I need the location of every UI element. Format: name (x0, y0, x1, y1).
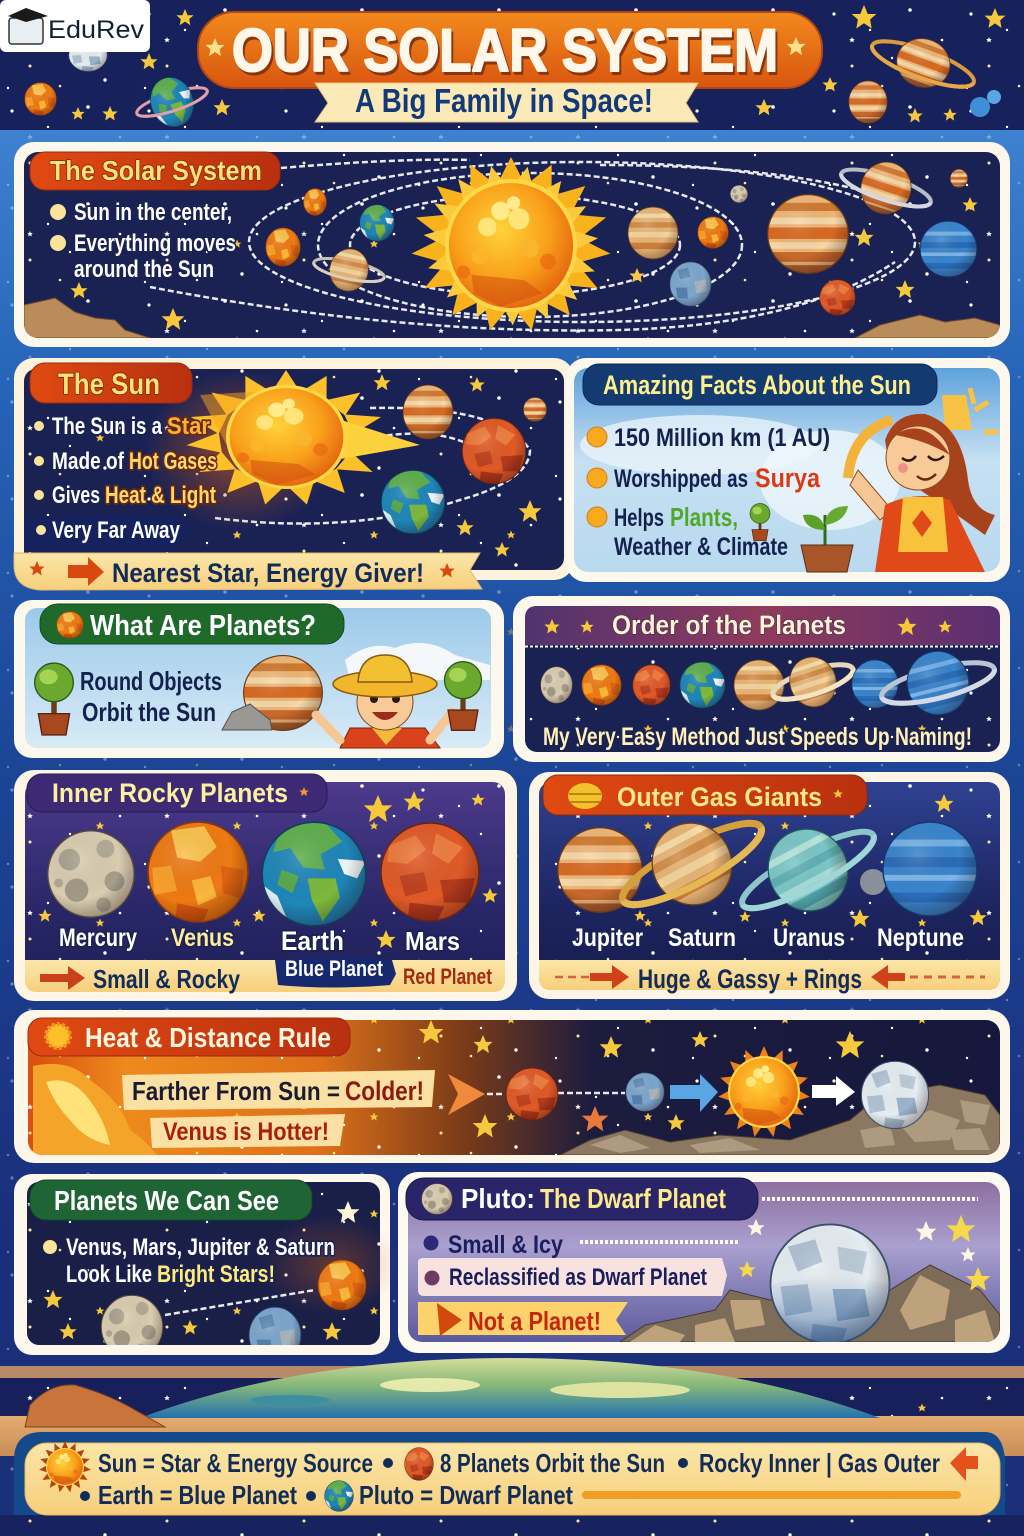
venus callout: Venus is Hotter! (163, 1118, 329, 1146)
rocks and pluto (620, 1222, 1000, 1346)
ribbon: nearest star: Nearest Star, Energy Giver! (112, 558, 424, 588)
sun facts list: Very Far Away (52, 517, 181, 544)
panel: summary (0, 1432, 1024, 1536)
summary line 2: Earth = Blue Planet (98, 1480, 297, 1510)
visibility text (43, 1234, 335, 1288)
ribbon: nearest star (14, 553, 482, 590)
sun facts list: Star (167, 413, 210, 440)
panel: the solar system (14, 142, 1010, 347)
caption band: Red Planet (403, 964, 493, 989)
planet: mars (379, 821, 481, 956)
heading: inner rocky planets: Inner Rocky Planets (52, 778, 288, 808)
rule callout: Farther From Sun = (132, 1076, 340, 1106)
fact: surya: Surya (755, 463, 821, 493)
definition text (80, 666, 222, 727)
heading: planets we can see: Planets We Can See (54, 1185, 279, 1216)
sun facts list: Heat & Light (105, 482, 216, 509)
icon: tree left (35, 663, 73, 735)
planet: mars: Mars (405, 926, 460, 956)
planet: earth: Earth (281, 926, 344, 956)
planet: mercury (46, 829, 137, 952)
panel: inner rocky planets (14, 770, 517, 1001)
bullet list: Everything moves (74, 230, 236, 257)
planet: saturn (603, 789, 781, 952)
panel: heat and distance rule (14, 1010, 1010, 1163)
heading: pluto: The Dwarf Planet (540, 1183, 726, 1214)
rocks and icy planet (560, 1060, 1000, 1155)
heading: the solar system: The Solar System (50, 155, 262, 186)
sun facts list: The Sun is a (52, 413, 162, 440)
panel: outer gas giants (529, 772, 1010, 999)
bullet list: around the Sun (74, 256, 214, 283)
planet: uranus: Uranus (773, 924, 845, 952)
summary line 1: Rocky Inner | Gas Outer (699, 1448, 940, 1478)
planet: venus (146, 820, 250, 952)
icon: tree right (445, 662, 481, 730)
caption band: Blue Planet (285, 956, 384, 981)
bullet list (50, 199, 236, 283)
ribbon: not a planet: Not a Planet! (468, 1306, 601, 1336)
planet and rocks (222, 654, 324, 732)
rock (25, 1385, 165, 1427)
title pill (198, 12, 822, 88)
gold stars (70, 197, 978, 330)
rule callout: Colder! (345, 1076, 424, 1106)
orbit paths (215, 408, 530, 524)
heading: planets we can see (30, 1180, 312, 1220)
heading: amazing facts (583, 364, 937, 405)
fact: small and icy (424, 1231, 738, 1259)
heading: the sun (30, 363, 192, 403)
rule callout (122, 1070, 435, 1110)
distance sequence (487, 1046, 855, 1138)
logo: EduRev: EduRev (48, 16, 145, 44)
row of eight planets (540, 637, 1002, 729)
gold stars (44, 1290, 342, 1340)
sun illustration (407, 148, 615, 342)
summary line 1 (98, 1447, 978, 1481)
gold stars (38, 791, 498, 948)
heading: heat and distance (28, 1018, 350, 1056)
gold stars (373, 374, 541, 556)
heading: what are planets (40, 604, 344, 644)
planet: jupiter: Jupiter (572, 924, 643, 952)
orbit rings (150, 160, 915, 330)
heading: heat and distance: Heat & Distance Rule (85, 1022, 331, 1053)
planet: jupiter (556, 826, 644, 952)
fact: reclassified (418, 1258, 727, 1296)
gold stars (419, 1020, 864, 1138)
sun facts list: Gives (52, 482, 100, 509)
sun facts list: Made of (52, 448, 125, 475)
planets (100, 1260, 366, 1345)
header decorative planets and stars (24, 5, 1005, 138)
summary line 2 (80, 1480, 961, 1512)
fact: surya: Worshipped as (614, 465, 748, 493)
planet: venus: Venus (171, 924, 234, 952)
panel: the sun (14, 358, 574, 590)
planet: neptune: Neptune (877, 924, 964, 952)
stars (738, 1215, 990, 1291)
caption band (25, 956, 505, 994)
landscape strip (0, 1358, 1024, 1456)
fact: plants and climate (587, 502, 788, 561)
planet: uranus (722, 797, 894, 952)
visibility text: Look Like (66, 1261, 152, 1288)
title text: OUR SOLAR SYSTEM (232, 17, 778, 84)
fact: reclassified: Reclassified as Dwarf Planet (449, 1264, 707, 1291)
heading: amazing facts: Amazing Facts About the Sun (603, 370, 911, 400)
icon: sun (39, 1441, 91, 1493)
heading: order of the planets: Order of the Planets (612, 610, 846, 640)
heading: inner rocky planets (27, 774, 327, 812)
planet: neptune (860, 820, 979, 952)
logo: EduRev (0, 0, 150, 52)
fact: distance: 150 Million km (1 AU) (614, 424, 830, 452)
fact: small and icy: Small & Icy (448, 1231, 563, 1259)
visibility text: Bright Stars! (157, 1261, 275, 1288)
summary line 1: 8 Planets Orbit the Sun (440, 1448, 665, 1478)
fact: plants and climate: Weather & Climate (614, 533, 788, 561)
visibility text: Venus, Mars, Jupiter & Saturn (66, 1234, 335, 1261)
sun facts list: Hot Gases (129, 448, 217, 475)
fact: plants and climate: Helps (614, 504, 664, 532)
illustration: boy with hat (316, 655, 452, 748)
planet: saturn: Saturn (668, 924, 736, 952)
asteroid rocks (24, 298, 1000, 338)
icon: potted sprout (801, 506, 853, 572)
planet: earth (260, 820, 368, 956)
sun facts list (24, 413, 217, 552)
earth horizon dome (140, 1358, 880, 1418)
planet: mercury: Mercury (59, 924, 137, 952)
panel: amazing facts about the sun (566, 358, 1010, 582)
caption band: Huge & Gassy + Rings (638, 964, 862, 994)
bullet list: Sun in the center, (74, 199, 232, 226)
header banner (0, 0, 1024, 138)
panel: pluto the dwarf planet (398, 1172, 1010, 1353)
heading: pluto: Pluto: (461, 1183, 535, 1214)
definition text: Round Objects (80, 666, 222, 696)
planets (380, 384, 547, 535)
panel: planets we can see (14, 1174, 400, 1364)
fact: plants and climate: Plants, (670, 502, 738, 532)
panel: order of the planets (513, 596, 1010, 762)
caption band (539, 960, 1000, 994)
ribbon: not a planet (418, 1302, 628, 1336)
arrow: orange (448, 1074, 485, 1115)
orbiting planets (265, 148, 978, 316)
heading: order of the planets (525, 606, 1000, 646)
caption band: Small & Rocky (93, 964, 240, 994)
heading: outer gas giants (543, 775, 867, 815)
subtitle ribbon: A Big Family in Space! (355, 82, 653, 119)
gold stars (634, 794, 987, 927)
illustration: girl with sun (848, 388, 998, 572)
flame (33, 1064, 157, 1155)
summary line 1: Sun = Star & Energy Source (98, 1448, 373, 1478)
heading: what are planets: What Are Planets? (90, 610, 316, 642)
heading: outer gas giants: Outer Gas Giants (617, 782, 822, 812)
panel: what are planets (14, 600, 504, 758)
glowing sun (145, 370, 420, 530)
summary line 2: Pluto = Dwarf Planet (359, 1480, 573, 1510)
heading: the sun: The Sun (58, 368, 160, 401)
heading: pluto (406, 1178, 978, 1220)
definition text: Orbit the Sun (82, 697, 216, 727)
